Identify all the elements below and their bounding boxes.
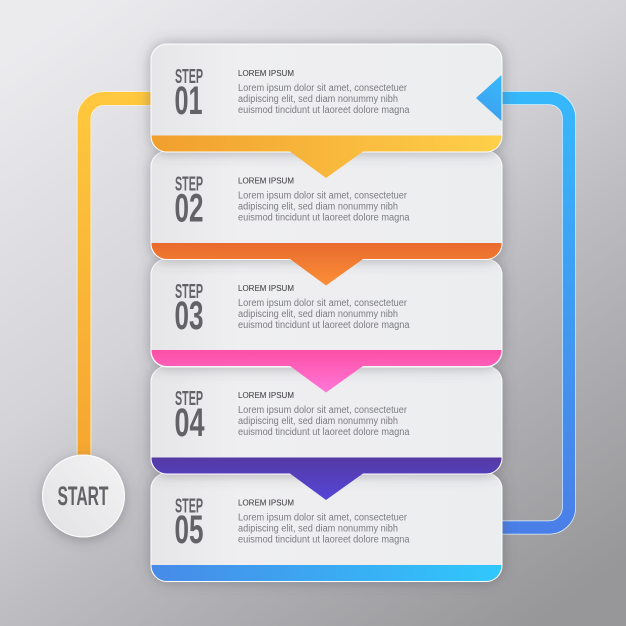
step 2 heading: LOREM IPSUM	[238, 176, 294, 186]
panel: step 4	[151, 366, 502, 500]
panel: step 1	[151, 44, 502, 178]
colour band 2 with pointer	[152, 243, 502, 286]
panel: step 5	[151, 473, 502, 582]
step 3 body text: euismod tincidunt ut laoreet dolore magna	[238, 320, 410, 331]
colour band 5	[152, 565, 502, 581]
panel: step 2	[151, 151, 502, 286]
step 1 body text: euismod tincidunt ut laoreet dolore magna	[238, 105, 410, 116]
step 2 label: STEP	[175, 172, 203, 196]
step 4 body text: adipiscing elit, sed diam nonummy nibh	[238, 416, 398, 427]
step 5 body text: Lorem ipsum dolor sit amet, consectetuer	[238, 512, 408, 524]
step 2 body text: adipiscing elit, sed diam nonummy nibh	[238, 202, 398, 212]
step 4 body text: Lorem ipsum dolor sit amet, consectetuer	[238, 405, 408, 416]
step 5 number: 05	[174, 508, 204, 552]
step 1 body text: Lorem ipsum dolor sit amet, consectetuer	[238, 83, 408, 94]
right connector pipe	[500, 98, 569, 528]
step 4 number: 04	[174, 401, 205, 445]
step 1 number: 01	[174, 79, 202, 123]
left connector pipe	[84, 98, 151, 460]
panel: step 3	[151, 259, 502, 392]
step 2 number: 02	[174, 186, 204, 230]
step 4 body text: euismod tincidunt ut laoreet dolore magna	[238, 427, 410, 438]
icon: blue return arrow	[476, 75, 502, 121]
step 5 body text: euismod tincidunt ut laoreet dolore magna	[238, 534, 410, 546]
step 2 body text: Lorem ipsum dolor sit amet, consectetuer	[238, 190, 408, 202]
step 3 number: 03	[174, 294, 204, 338]
step 3 label: STEP	[175, 280, 203, 303]
step 5 body text: adipiscing elit, sed diam nonummy nibh	[238, 524, 398, 534]
step 5 heading: LOREM IPSUM	[238, 498, 294, 508]
step 1 body text: adipiscing elit, sed diam nonummy nibh	[238, 94, 398, 105]
step 3 body text: Lorem ipsum dolor sit amet, consectetuer	[238, 298, 408, 309]
start node	[42, 455, 124, 537]
step 4 heading: LOREM IPSUM	[238, 390, 294, 400]
step 1 label: STEP	[175, 65, 203, 88]
start label: START	[58, 481, 109, 511]
colour band 1 with pointer	[152, 136, 502, 178]
step 3 body text: adipiscing elit, sed diam nonummy nibh	[238, 309, 398, 320]
step 5 label: STEP	[175, 494, 203, 518]
colour band 3 with pointer	[152, 350, 502, 392]
step 3 heading: LOREM IPSUM	[238, 283, 294, 293]
step 1 heading: LOREM IPSUM	[238, 68, 294, 78]
step 4 label: STEP	[175, 387, 203, 410]
step 2 body text: euismod tincidunt ut laoreet dolore magna	[238, 212, 410, 224]
colour band 4 with pointer	[152, 458, 502, 500]
